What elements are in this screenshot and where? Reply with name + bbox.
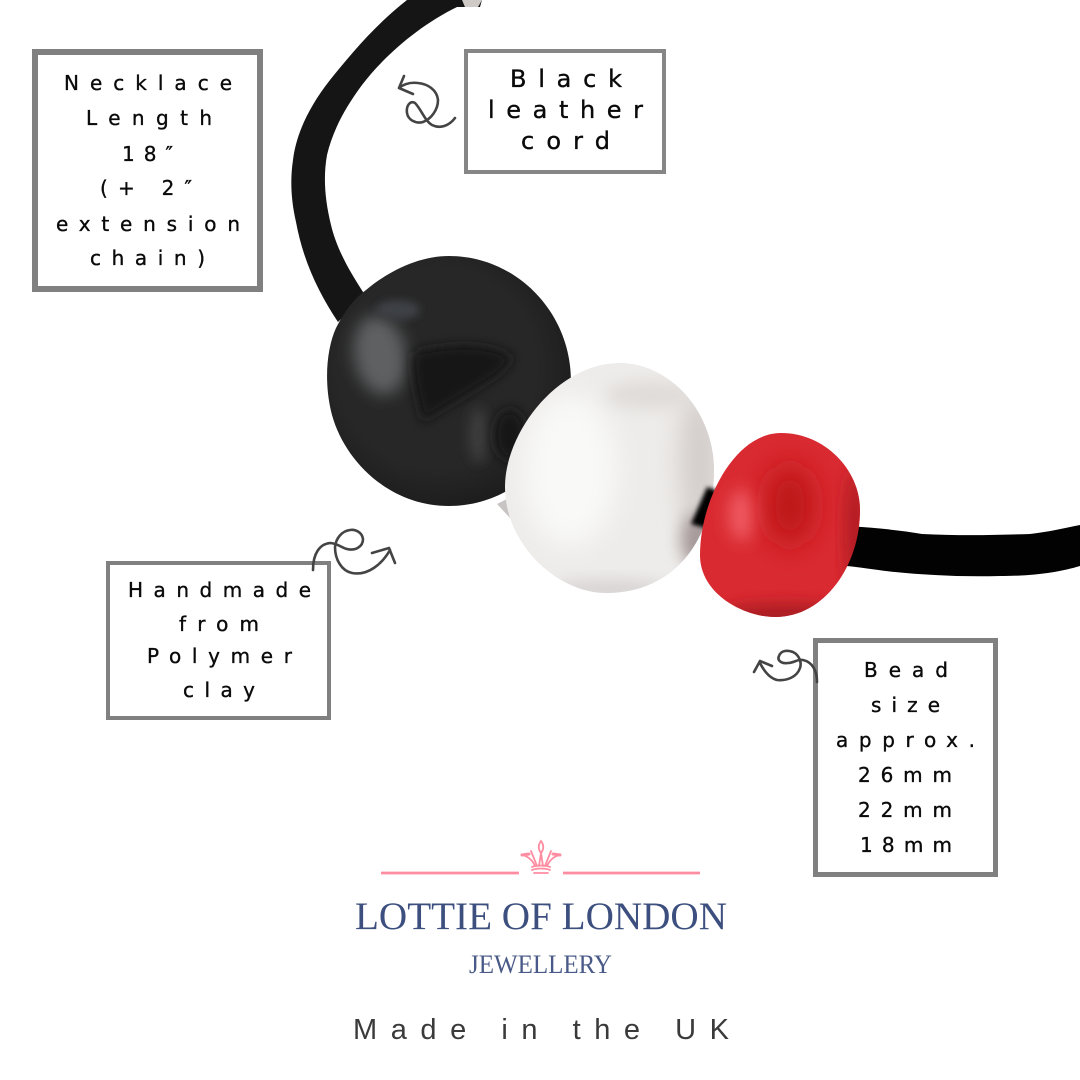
panel: handmade from polymer clay: Polymer <box>147 644 293 668</box>
panel: bead size: size <box>871 693 940 717</box>
panel: bead size: approx. <box>836 728 975 752</box>
photo: leather cord, right section <box>846 525 1080 576</box>
panel: black leather cord: cord <box>521 127 610 155</box>
panel: black leather cord <box>466 51 664 172</box>
tagline: Made in the UK <box>353 1014 730 1046</box>
arrow: to leather cord <box>399 76 455 127</box>
panel: black leather cord: Black <box>510 65 622 93</box>
panel: black leather cord: leather <box>488 96 643 124</box>
arrow: to black bead <box>313 530 395 573</box>
arrow: to red bead <box>754 651 817 682</box>
photo: leather cord, upper section <box>291 0 482 322</box>
photo: black bead <box>327 256 571 506</box>
panel: necklace length: 18″ <box>122 142 173 166</box>
panel: necklace length: extension <box>56 212 240 236</box>
panel: bead size: 26mm <box>858 763 952 787</box>
photo: cord between white and red beads <box>691 487 722 530</box>
photo: white bead <box>497 498 520 520</box>
panel: handmade from polymer clay: Handmade <box>128 578 311 602</box>
photo: red bead <box>700 433 860 617</box>
panel: handmade from polymer clay: clay <box>183 678 255 702</box>
logo: brand name: LOTTIE OF LONDON <box>355 895 727 938</box>
panel: necklace length <box>35 52 260 289</box>
panel: handmade from polymer clay: from <box>179 612 259 636</box>
logo: jewellery: JEWELLERY <box>469 950 612 979</box>
panel: handmade from polymer clay <box>108 563 329 718</box>
panel: bead size <box>816 640 996 874</box>
panel: bead size: 22mm <box>858 798 952 822</box>
logo: crown and rules <box>381 841 700 873</box>
panel: necklace length: Necklace <box>64 71 232 95</box>
panel: necklace length: Length <box>86 106 212 130</box>
panel: bead size: 18mm <box>860 833 952 857</box>
panel: necklace length: (+ 2″ <box>100 176 192 200</box>
panel: necklace length: chain) <box>90 246 205 270</box>
panel: bead size: Bead <box>864 658 948 682</box>
